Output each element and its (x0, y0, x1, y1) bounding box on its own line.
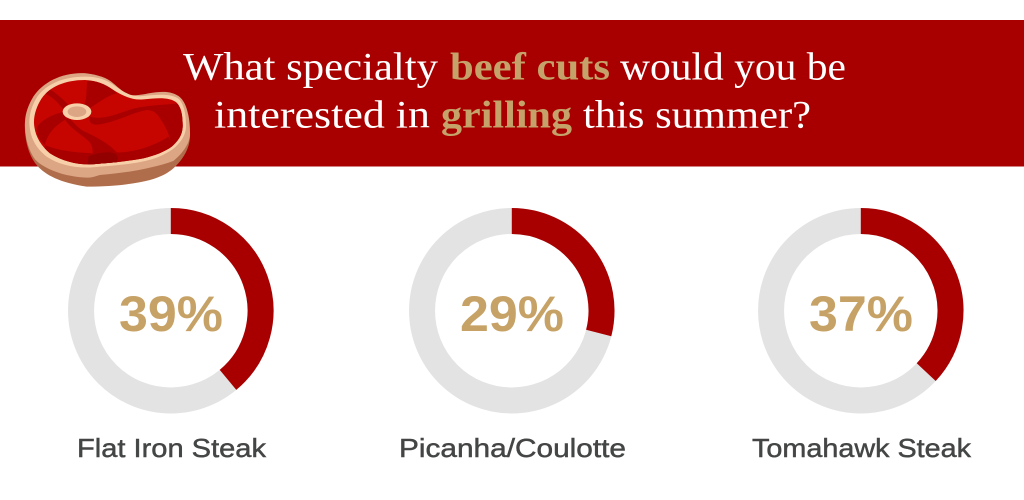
donut chart: Flat Iron Steak: 39% (119, 286, 223, 342)
icon: steak (25, 73, 190, 187)
donut chart: Tomahawk Steak: 37% (809, 286, 913, 342)
fat marbling (37, 81, 187, 170)
title: this summer? (583, 92, 811, 136)
title: beef cuts (450, 44, 610, 88)
title: would you be (620, 44, 846, 88)
title: What specialty (183, 44, 438, 88)
header banner (0, 20, 1024, 166)
title (183, 44, 846, 136)
donut chart: Tomahawk Steak (771, 221, 951, 400)
title: grilling (441, 92, 572, 136)
bone (63, 103, 91, 120)
dark patch (88, 152, 118, 164)
side band (25, 73, 190, 178)
label: Picanha/Coulotte: Picanha/Coulotte (399, 433, 626, 463)
donut chart: Picanha/Coulotte: 29% (460, 286, 564, 342)
steak base (25, 117, 190, 187)
label: Tomahawk Steak: Tomahawk Steak (752, 433, 972, 463)
donut chart: Picanha/Coulotte (422, 221, 602, 400)
cream rim (29, 77, 186, 168)
meat surface (34, 80, 183, 164)
label: Flat Iron Steak: Flat Iron Steak (77, 433, 267, 463)
title: interested in (214, 92, 430, 136)
donut chart: Flat Iron Steak (81, 221, 261, 400)
